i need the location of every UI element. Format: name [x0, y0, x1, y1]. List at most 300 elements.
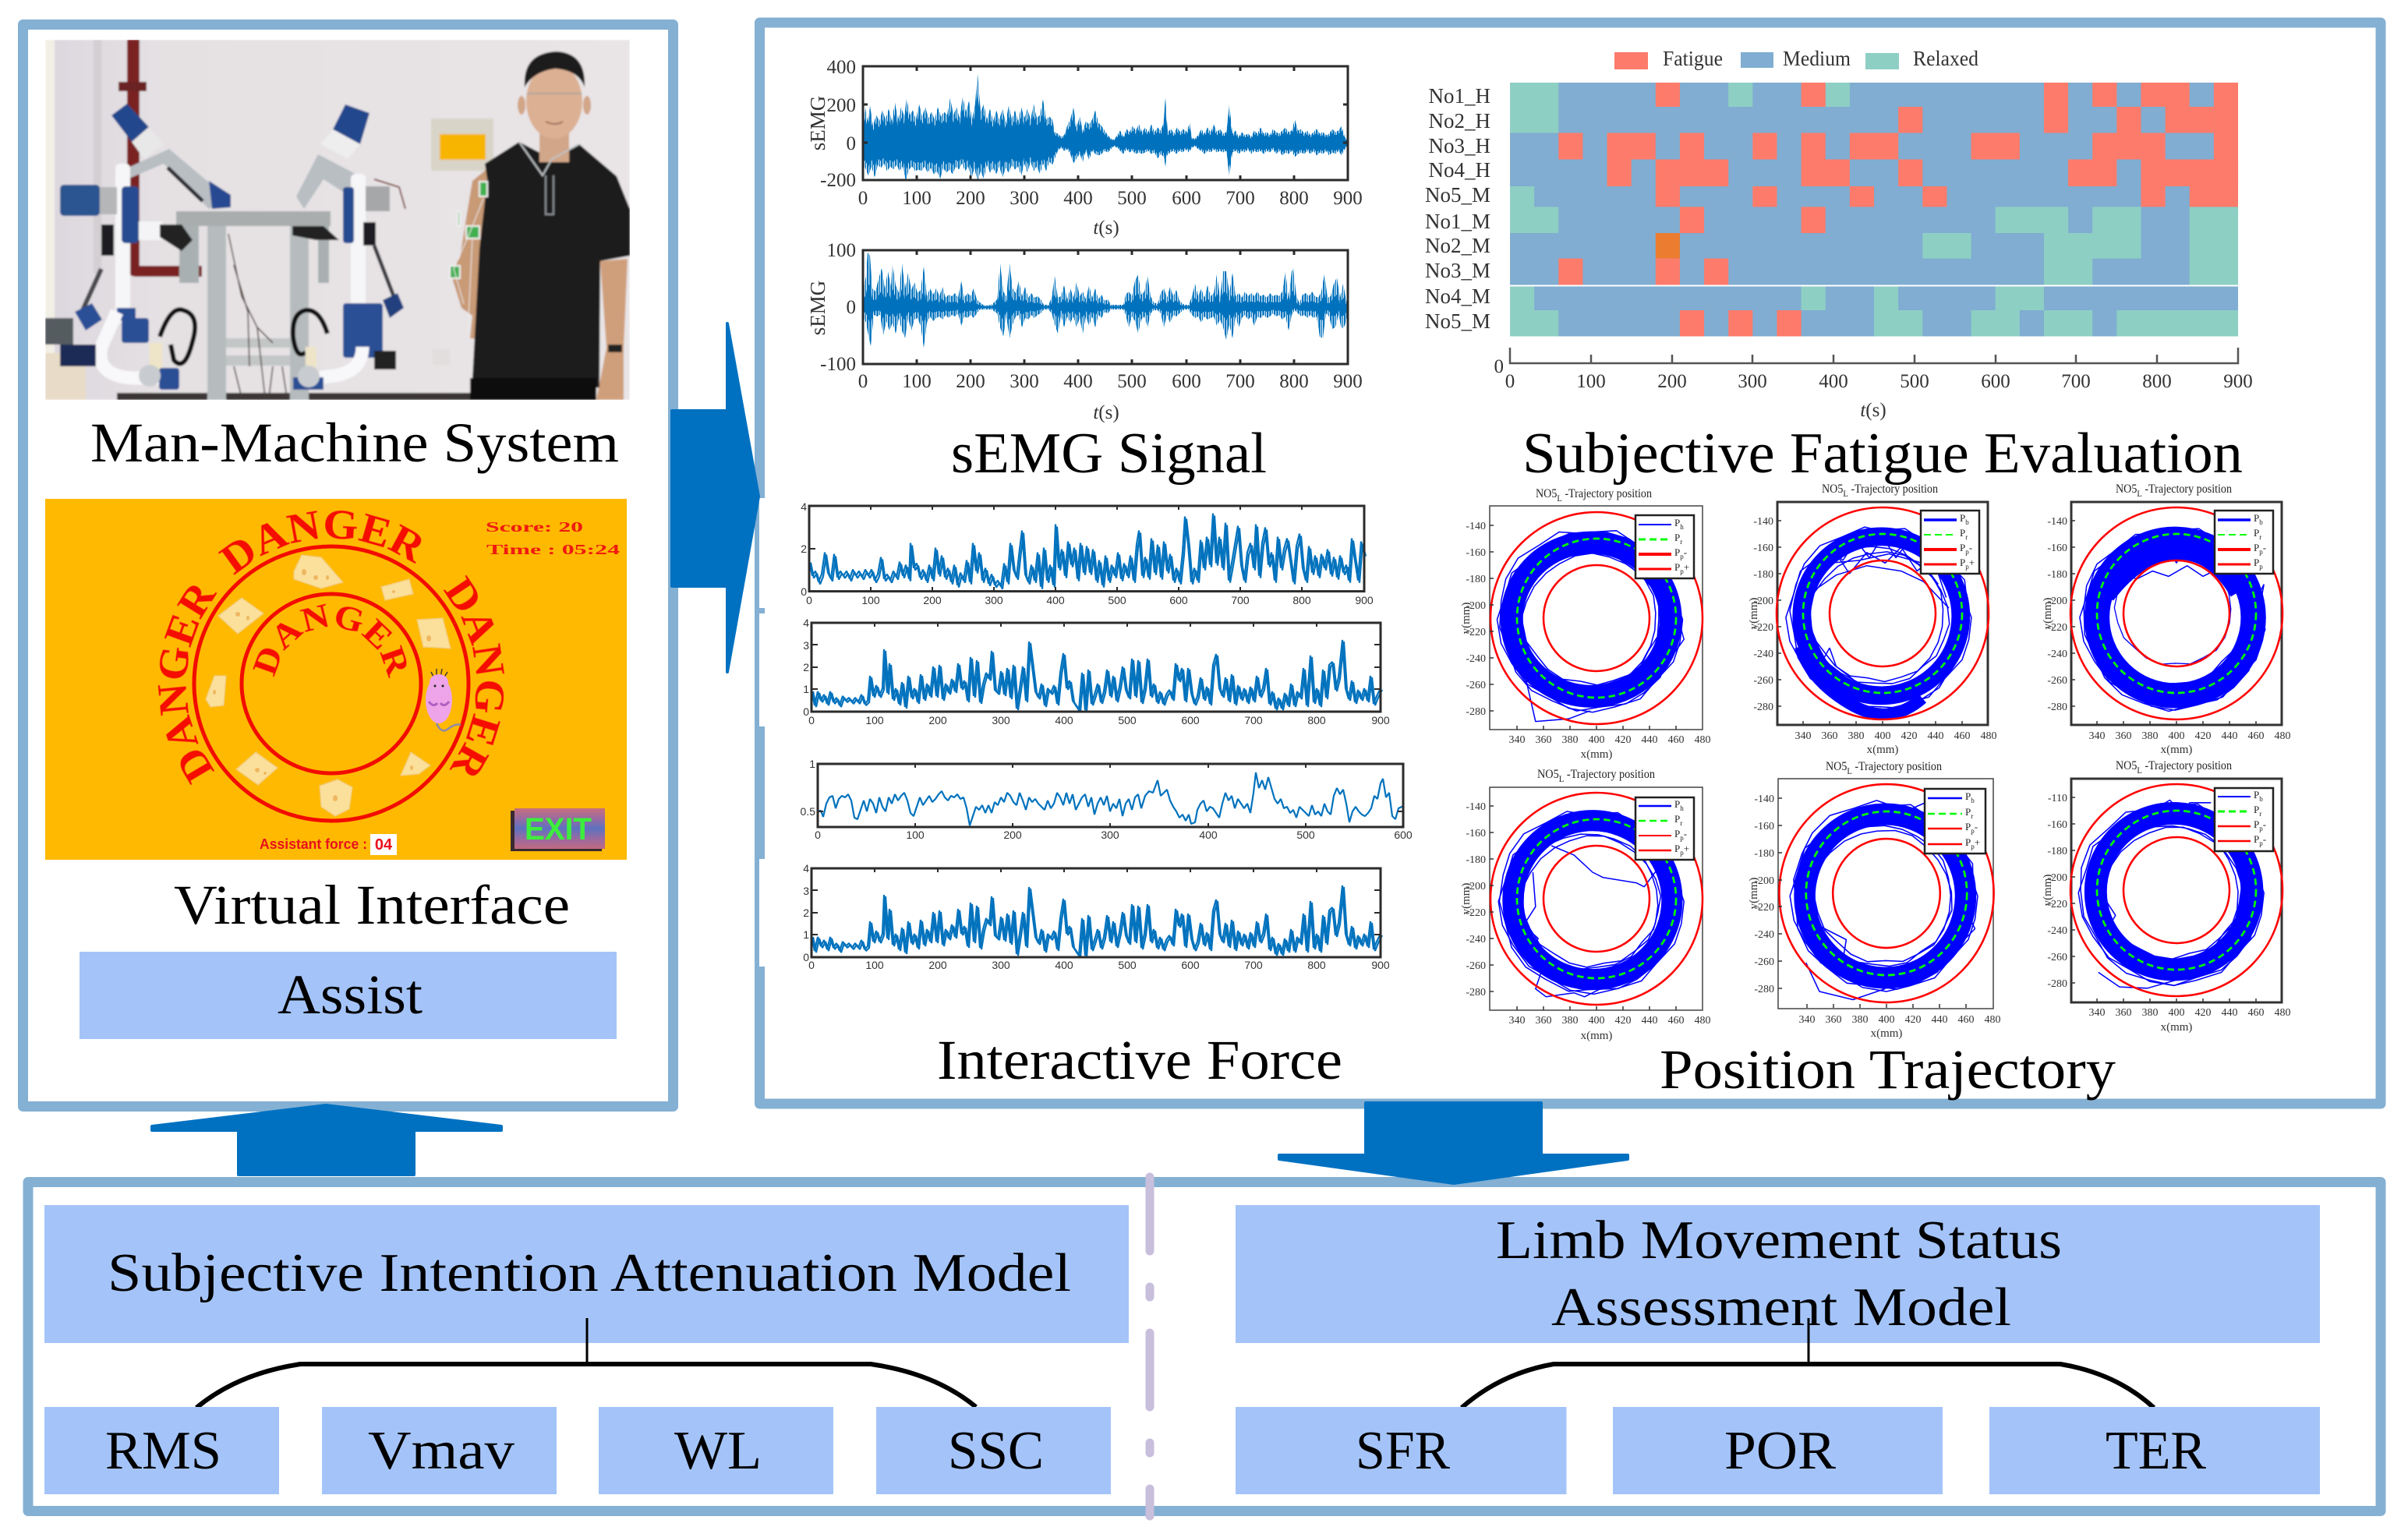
chart: trajectory position 3: 360 — [2116, 730, 2131, 742]
legend: trajectory lines: r — [1680, 819, 1682, 827]
chart: trajectory position 3: -160 — [2047, 543, 2067, 554]
box: Assist: Assist — [278, 963, 423, 1026]
box: SFR — [1236, 1407, 1567, 1494]
chart: trajectory position 1: -240 — [1466, 653, 1486, 665]
chart: sEMG signal 2: 500 — [1117, 371, 1147, 392]
chart: interactive force 4: 200 — [928, 959, 947, 971]
box: RMS — [44, 1407, 279, 1494]
box: Subjective Intention Attenuation Model: Subjective Intention Attenuation Model — [108, 1243, 1071, 1303]
chart: trajectory position 2: y(mm) — [1748, 598, 1760, 629]
chart: interactive force 3: 200 — [1003, 829, 1022, 841]
chart: subjective fatigue heatmap: t(s) — [1860, 400, 1886, 421]
chart: trajectory position 5: -140 — [1754, 794, 1774, 805]
legend: trajectory lines: - — [2263, 833, 2266, 845]
chart: trajectory position 1: 400 — [1589, 734, 1604, 746]
icon: mouse — [426, 669, 461, 730]
chart: sEMG signal 1: 300 — [1010, 188, 1039, 209]
heading: Position Trajectory: Position Trajectory — [1660, 1038, 2116, 1101]
chart: trajectory position 3: 340 — [2089, 730, 2105, 742]
chart: trajectory position 2: -240 — [1753, 649, 1773, 660]
legend: trajectory lines: r — [2259, 810, 2261, 818]
chart: trajectory position 3: -Trajectory position — [2142, 482, 2232, 496]
legend: trajectory lines: P — [1965, 836, 1971, 848]
legend: trajectory lines: p — [2259, 563, 2263, 571]
chart: sEMG signal 2: 300 — [1010, 371, 1039, 392]
box: Limb Movement Status Assessment Model — [1236, 1205, 2320, 1343]
chart: trajectory position 2: -140 — [1753, 516, 1773, 528]
chart: trajectory position 2: L — [1843, 488, 1848, 499]
chart: subjective fatigue heatmap: 400 — [1819, 371, 1848, 392]
chart: trajectory position 4: 360 — [1536, 1015, 1551, 1027]
box: WL: WL — [674, 1421, 762, 1481]
chart: subjective fatigue heatmap: 200 — [1657, 371, 1687, 392]
chart: interactive force 2: 800 — [1307, 714, 1326, 726]
box: POR — [1613, 1407, 1943, 1494]
chart: trajectory position 2: 480 — [1980, 730, 1997, 742]
chart: trajectory position 1: 360 — [1536, 734, 1551, 746]
chart: trajectory position 6: 340 — [2089, 1007, 2105, 1019]
box: WL — [599, 1407, 833, 1494]
panel: signal data — [759, 23, 2381, 1104]
chart: sEMG signal 2: 600 — [1172, 371, 1201, 392]
box: SFR: SFR — [1356, 1421, 1450, 1481]
legend: trajectory lines — [2215, 788, 2273, 851]
chart: trajectory position 5: 400 — [1879, 1014, 1894, 1026]
box: Assist — [80, 952, 617, 1039]
chart: sEMG signal 2: sEMG — [806, 281, 829, 335]
legend: trajectory lines: b — [2259, 795, 2263, 803]
panel: models — [28, 1177, 2381, 1516]
chart: interactive force 1: 500 — [1108, 594, 1126, 606]
chart: trajectory position 3: 380 — [2142, 730, 2158, 742]
chart: sEMG signal 1: 900 — [1333, 188, 1363, 209]
chart: sEMG signal 1: t(s) — [1093, 217, 1119, 239]
chart: interactive force 3 — [801, 758, 1413, 841]
chart: trajectory position 3: -200 — [2047, 596, 2067, 607]
chart: interactive force 4: 3 — [803, 885, 809, 897]
chart: sEMG signal 1: 200 — [956, 188, 985, 209]
chart: subjective fatigue heatmap: No2_M — [1425, 234, 1490, 257]
chart: trajectory position 4: 400 — [1589, 1015, 1604, 1027]
chart: interactive force 2: 100 — [865, 714, 884, 726]
chart: trajectory position 5: NO5 — [1826, 760, 1850, 773]
chart: interactive force 2: 900 — [1371, 714, 1390, 726]
chart: trajectory position 3: -260 — [2047, 675, 2067, 687]
chart: trajectory position 1: 340 — [1509, 734, 1525, 746]
box: POR: POR — [1724, 1421, 1836, 1481]
legend: trajectory lines: - — [1975, 821, 1978, 832]
legend: trajectory lines: P — [2254, 818, 2259, 830]
chart: subjective fatigue heatmap: No1_H — [1428, 84, 1490, 108]
chart: trajectory position 2: 360 — [1821, 730, 1838, 742]
chart: subjective fatigue heatmap: 700 — [2061, 371, 2091, 392]
chart: sEMG signal 1: 0 — [858, 188, 868, 209]
chart: trajectory position 1: y(mm) — [1460, 603, 1473, 634]
chart: trajectory position 4: -260 — [1466, 960, 1486, 972]
box: Limb Movement Status Assessment Model: Assessment Model — [1551, 1278, 2011, 1338]
chart: trajectory position 5 — [1748, 760, 2011, 1040]
chart: interactive force 1: 0 — [806, 594, 812, 606]
chart: interactive force 4: 700 — [1244, 959, 1263, 971]
chart: interactive force 3: 400 — [1199, 829, 1218, 841]
chart: trajectory position 3: NO5 — [2116, 482, 2140, 496]
chart: trajectory position 6: -220 — [2047, 899, 2067, 910]
chart: interactive force 4: 1 — [803, 928, 809, 941]
chart: sEMG signal 2: 400 — [1063, 371, 1093, 392]
chart: interactive force 4: 4 — [803, 862, 809, 875]
legend: trajectory lines: P — [1674, 798, 1680, 810]
chart: trajectory position 4: -220 — [1466, 907, 1486, 919]
legend: trajectory lines: P — [2254, 804, 2259, 815]
game screenshot: virtual interface: 04 — [375, 836, 393, 854]
heading: Interactive Force: Interactive Force — [937, 1029, 1342, 1091]
legend: trajectory lines: + — [1684, 561, 1689, 573]
legend: trajectory lines: + — [1975, 836, 1980, 848]
chart: subjective fatigue heatmap: 500 — [1900, 371, 1929, 392]
legend: trajectory lines: r — [2259, 533, 2261, 541]
chart: subjective fatigue heatmap — [1425, 47, 2253, 421]
legend: trajectory lines — [1921, 511, 1979, 574]
chart: trajectory position 6 — [2042, 759, 2295, 1034]
chart: interactive force 1: 4 — [801, 500, 807, 513]
chart: trajectory position 5: 340 — [1799, 1014, 1815, 1026]
chart: sEMG signal 1: 400 — [1063, 188, 1093, 209]
game screenshot: virtual interface: DANGER — [218, 510, 421, 575]
game screenshot: virtual interface — [45, 499, 627, 860]
chart: sEMG signal 2: 0 — [847, 297, 856, 318]
legend: trajectory lines: p — [1965, 548, 1969, 556]
chart: sEMG signal 2 — [806, 240, 1363, 423]
chart: interactive force 3: 600 — [1394, 829, 1413, 841]
chart: sEMG signal 2: 700 — [1225, 371, 1255, 392]
box: Vmav — [322, 1407, 557, 1494]
legend: trajectory lines: P — [1674, 532, 1680, 543]
legend: trajectory lines: b — [1971, 797, 1975, 804]
chart: sEMG signal 2: -100 — [820, 354, 856, 375]
chart: trajectory position 3: 440 — [2222, 730, 2237, 742]
legend: trajectory lines: P — [1960, 557, 1965, 568]
chart: trajectory position 2: 440 — [1927, 730, 1944, 742]
chart: trajectory position 2: 340 — [1795, 730, 1812, 742]
photo: exoskeleton robot and standing user — [45, 40, 630, 400]
chart: trajectory position 1: -280 — [1466, 706, 1486, 718]
chart: sEMG signal 2: 100 — [902, 371, 932, 392]
chart: trajectory position 4: -160 — [1466, 828, 1486, 839]
legend: trajectory lines: p — [1971, 827, 1975, 835]
chart: trajectory position 1: 440 — [1642, 734, 1657, 746]
legend: trajectory lines: P — [1960, 542, 1965, 553]
legend: trajectory lines: p — [1680, 553, 1684, 560]
chart: trajectory position 5: 380 — [1852, 1014, 1868, 1026]
chart: trajectory position 5: y(mm) — [1748, 878, 1760, 909]
chart: trajectory position 6: x(mm) — [2161, 1021, 2192, 1034]
chart: interactive force 4: 500 — [1118, 959, 1137, 971]
chart: sEMG signal 2: t(s) — [1093, 402, 1119, 423]
chart: trajectory position 1: 420 — [1615, 734, 1631, 746]
chart: interactive force 4: 300 — [992, 959, 1010, 971]
chart: sEMG signal 1: 700 — [1225, 188, 1255, 209]
chart: interactive force 2: 0 — [808, 714, 815, 726]
chart: interactive force 2: 600 — [1181, 714, 1200, 726]
chart: interactive force 2: 2 — [803, 661, 809, 673]
chart: sEMG signal 2: 0 — [858, 371, 868, 392]
legend: trajectory lines: r — [1680, 538, 1682, 546]
chart: trajectory position 4: NO5 — [1537, 768, 1561, 781]
legend: trajectory lines: b — [1965, 518, 1969, 526]
chart: trajectory position 5: 420 — [1905, 1014, 1921, 1026]
chart: interactive force 3: 500 — [1296, 829, 1315, 841]
chart: trajectory position 4: 480 — [1695, 1015, 1710, 1027]
heading: sEMG Signal: sEMG Signal — [951, 422, 1267, 486]
arrow: down, to limb model — [1279, 1103, 1628, 1183]
chart: trajectory position 2: -200 — [1753, 596, 1773, 607]
legend: trajectory lines — [2215, 511, 2273, 574]
box: SSC: SSC — [948, 1421, 1044, 1481]
legend: trajectory lines: - — [2263, 818, 2266, 830]
chart: trajectory position 1: -180 — [1466, 574, 1486, 585]
chart: interactive force 4: 0 — [808, 959, 815, 971]
chart: trajectory position 2: 460 — [1954, 730, 1971, 742]
chart: interactive force 2: 0 — [803, 705, 809, 718]
chart: trajectory position 4: -240 — [1466, 934, 1486, 945]
chart: trajectory position 6: -260 — [2047, 952, 2067, 963]
chart: interactive force 3: 300 — [1101, 829, 1119, 841]
chart: interactive force 2 — [803, 617, 1390, 726]
box: Subjective Intention Attenuation Model — [44, 1205, 1129, 1343]
legend: fatigue levels: Fatigue — [1663, 47, 1723, 70]
chart: sEMG signal 1: -200 — [820, 170, 856, 191]
chart: trajectory position 1: x(mm) — [1581, 748, 1612, 761]
legend: trajectory lines: P — [1674, 517, 1680, 528]
chart: interactive force 2: 4 — [803, 617, 809, 629]
chart: trajectory position 2: NO5 — [1822, 482, 1846, 496]
game screenshot: virtual interface: Time : 05:24 — [486, 542, 620, 557]
game screenshot: virtual interface: DANGER — [157, 585, 217, 786]
chart: interactive force 1: 700 — [1231, 594, 1250, 606]
chart: trajectory position 2: x(mm) — [1867, 744, 1898, 756]
chart: trajectory position 2: -160 — [1753, 543, 1773, 554]
chart: trajectory position 3: -140 — [2047, 516, 2067, 528]
chart: trajectory position 3: -220 — [2047, 622, 2067, 634]
chart: sEMG signal 1: 500 — [1117, 188, 1147, 209]
legend: trajectory lines: - — [1684, 828, 1687, 839]
chart: sEMG signal 2: 900 — [1333, 371, 1363, 392]
chart: trajectory position 6: y(mm) — [2042, 875, 2054, 906]
game screenshot: virtual interface: DANGER — [443, 575, 505, 776]
chart: interactive force 2: 3 — [803, 639, 809, 652]
chart: trajectory position 2: -280 — [1753, 702, 1773, 713]
chart: subjective fatigue heatmap: 600 — [1981, 371, 2010, 392]
chart: trajectory position 5: 480 — [1985, 1014, 2000, 1026]
chart: trajectory position 6: -240 — [2047, 925, 2067, 937]
chart: trajectory position 4: 420 — [1615, 1015, 1631, 1027]
chart: interactive force 3: 0 — [815, 829, 821, 841]
legend: trajectory lines: p — [1680, 834, 1684, 842]
chart: trajectory position 3: -240 — [2047, 649, 2067, 660]
legend: trajectory lines: P — [1674, 813, 1680, 825]
chart: interactive force 3: 100 — [906, 829, 925, 841]
chart: trajectory position 1: -260 — [1466, 680, 1486, 691]
legend: trajectory lines: P — [1965, 806, 1971, 818]
chart: trajectory position 2: -220 — [1753, 622, 1773, 634]
legend: trajectory lines: - — [1684, 546, 1687, 558]
chart: trajectory position 3 — [2042, 482, 2300, 756]
chart: interactive force 1: 600 — [1169, 594, 1188, 606]
chart: trajectory position 3: 480 — [2275, 730, 2290, 742]
box: RMS: RMS — [105, 1421, 221, 1481]
chart: subjective fatigue heatmap: 800 — [2142, 371, 2172, 392]
chart: trajectory position 4: y(mm) — [1460, 883, 1473, 914]
chart: trajectory position 3: L — [2137, 488, 2142, 499]
button: EXIT: EXIT — [525, 812, 592, 847]
legend: trajectory lines: p — [1971, 843, 1975, 850]
chart: interactive force 1: 200 — [923, 594, 942, 606]
box: TER: TER — [2106, 1421, 2206, 1481]
legend: fatigue levels — [1614, 47, 1978, 70]
legend: trajectory lines: P — [2254, 789, 2259, 801]
chart: subjective fatigue heatmap: No4_H — [1428, 158, 1490, 182]
chart: sEMG signal 2: 200 — [956, 371, 985, 392]
chart: sEMG signal 1: 200 — [826, 95, 856, 116]
legend: trajectory lines: p — [1965, 563, 1969, 571]
legend: trajectory lines: - — [2263, 542, 2266, 553]
chart: interactive force 1: 0 — [801, 585, 807, 598]
chart: trajectory position 5: -220 — [1754, 902, 1774, 914]
chart: interactive force 4: 600 — [1181, 959, 1200, 971]
chart: trajectory position 5: 360 — [1826, 1014, 1841, 1026]
chart: interactive force 4: 400 — [1055, 959, 1073, 971]
chart: trajectory position 5: -240 — [1754, 929, 1774, 941]
game screenshot: virtual interface: Score: 20 — [486, 519, 583, 535]
arrow: up, to man-machine panel — [152, 1105, 501, 1175]
chart: trajectory position 5: -160 — [1754, 821, 1774, 832]
chart: trajectory position 2: -180 — [1753, 569, 1773, 581]
chart: subjective fatigue heatmap: 900 — [2223, 371, 2253, 392]
chart: trajectory position 4: 380 — [1562, 1015, 1578, 1027]
chart: trajectory position 4: -280 — [1466, 987, 1486, 999]
chart: interactive force 4 — [803, 862, 1390, 971]
legend: trajectory lines: P — [2254, 557, 2259, 568]
chart: interactive force 4: 800 — [1307, 959, 1326, 971]
legend: trajectory lines: p — [1680, 849, 1684, 857]
legend: trajectory lines: P — [2254, 512, 2259, 524]
chart: trajectory position 3: -280 — [2047, 702, 2067, 713]
legend: trajectory lines: b — [2259, 518, 2263, 526]
chart: subjective fatigue heatmap: 300 — [1738, 371, 1767, 392]
chart: trajectory position 2: 380 — [1848, 730, 1865, 742]
chart: trajectory position 4: 440 — [1642, 1015, 1657, 1027]
chart: trajectory position 5: -280 — [1754, 984, 1774, 995]
chart: subjective fatigue heatmap: No3_M — [1425, 259, 1490, 282]
chart: sEMG signal 1: 100 — [902, 188, 932, 209]
connector: subjective model bracket — [196, 1318, 976, 1408]
chart: interactive force 4: 100 — [865, 959, 884, 971]
chart: sEMG signal 2: 800 — [1279, 371, 1309, 392]
legend: trajectory lines: P — [1674, 843, 1680, 854]
chart: trajectory position 5: -Trajectory position — [1852, 760, 1942, 773]
legend: trajectory lines: P — [1674, 561, 1680, 573]
chart: trajectory position 1 — [1459, 487, 1717, 761]
chart: trajectory position 6: NO5 — [2116, 759, 2140, 772]
chart: trajectory position 2: -260 — [1753, 675, 1773, 687]
chart: trajectory position 5: L — [1847, 765, 1852, 776]
chart: sEMG signal 1: 400 — [826, 57, 856, 78]
chart: trajectory position 1: -160 — [1466, 547, 1486, 559]
chart: interactive force 1: 100 — [861, 594, 880, 606]
chart: interactive force 1: 900 — [1355, 594, 1374, 606]
chart: subjective fatigue heatmap: No4_M — [1425, 285, 1490, 308]
chart: interactive force 2: 400 — [1055, 714, 1073, 726]
chart: interactive force 4: 2 — [803, 907, 809, 919]
chart: sEMG signal 1: 600 — [1172, 188, 1201, 209]
legend: trajectory lines: P — [1965, 821, 1971, 832]
chart: interactive force 2: 300 — [992, 714, 1010, 726]
chart: interactive force 1: 400 — [1046, 594, 1065, 606]
chart: trajectory position 1: 380 — [1562, 734, 1578, 746]
chart: sEMG signal 1 — [806, 57, 1363, 239]
chart: trajectory position 2: 400 — [1874, 730, 1891, 742]
chart: interactive force 2: 1 — [803, 683, 809, 695]
chart: trajectory position 1: -Trajectory position — [1562, 487, 1652, 500]
chart: trajectory position 3: y(mm) — [2042, 598, 2054, 629]
chart: interactive force 1: 300 — [985, 594, 1003, 606]
legend: trajectory lines: P — [1674, 828, 1680, 839]
chart: trajectory position 4: -200 — [1466, 881, 1486, 892]
chart: trajectory position 5: -260 — [1754, 956, 1774, 968]
chart: trajectory position 6: 400 — [2169, 1007, 2184, 1019]
chart: trajectory position 6: 380 — [2142, 1007, 2158, 1019]
chart: trajectory position 2 — [1748, 482, 2007, 756]
chart: trajectory position 6: -280 — [2047, 978, 2067, 990]
legend: trajectory lines: r — [1965, 533, 1968, 541]
chart: trajectory position 4: -Trajectory position — [1564, 768, 1655, 781]
legend: trajectory lines: + — [1684, 843, 1689, 854]
chart: trajectory position 6: -110 — [2048, 793, 2067, 804]
chart: trajectory position 6: -Trajectory position — [2142, 759, 2232, 772]
box: Limb Movement Status Assessment Model: Limb Movement Status — [1496, 1211, 2062, 1271]
chart: trajectory position 5: x(mm) — [1871, 1027, 1902, 1040]
box: TER — [1989, 1407, 2320, 1494]
chart: interactive force 1 — [801, 500, 1374, 606]
chart: interactive force 4: 0 — [803, 951, 809, 963]
heading: Man-Machine System: Man-Machine System — [90, 412, 619, 474]
chart: trajectory position 6: 420 — [2195, 1007, 2211, 1019]
chart: sEMG signal 2: 100 — [826, 240, 856, 261]
chart: subjective fatigue heatmap: 0 — [1505, 371, 1515, 392]
box: Vmav: Vmav — [368, 1421, 514, 1481]
chart: trajectory position 6: -160 — [2047, 819, 2067, 831]
chart: subjective fatigue heatmap: No3_H — [1428, 134, 1490, 157]
legend: trajectory lines: P — [1674, 546, 1680, 558]
heading: Subjective Fatigue Evaluation: Subjective Fatigue Evaluation — [1522, 422, 2243, 486]
button: EXIT — [511, 808, 605, 851]
chart: sEMG signal 1: 0 — [847, 133, 856, 154]
chart: interactive force 2: 700 — [1244, 714, 1263, 726]
chart: trajectory position 3: x(mm) — [2161, 744, 2192, 756]
chart: trajectory position 1: -200 — [1466, 600, 1486, 612]
chart: interactive force 4: 900 — [1371, 959, 1390, 971]
legend: trajectory lines: P — [2254, 833, 2259, 845]
chart: trajectory position 2: 420 — [1901, 730, 1918, 742]
legend: trajectory lines: + — [1969, 557, 1975, 568]
chart: trajectory position 1: 480 — [1695, 734, 1710, 746]
chart: subjective fatigue heatmap: No5_M — [1425, 183, 1490, 207]
legend: trajectory lines — [1635, 515, 1694, 578]
chart: trajectory position 3: -180 — [2047, 569, 2067, 581]
chart: trajectory position 4: L — [1559, 773, 1564, 784]
legend: trajectory lines: p — [2259, 839, 2263, 847]
chart: trajectory position 1: -140 — [1466, 521, 1486, 532]
